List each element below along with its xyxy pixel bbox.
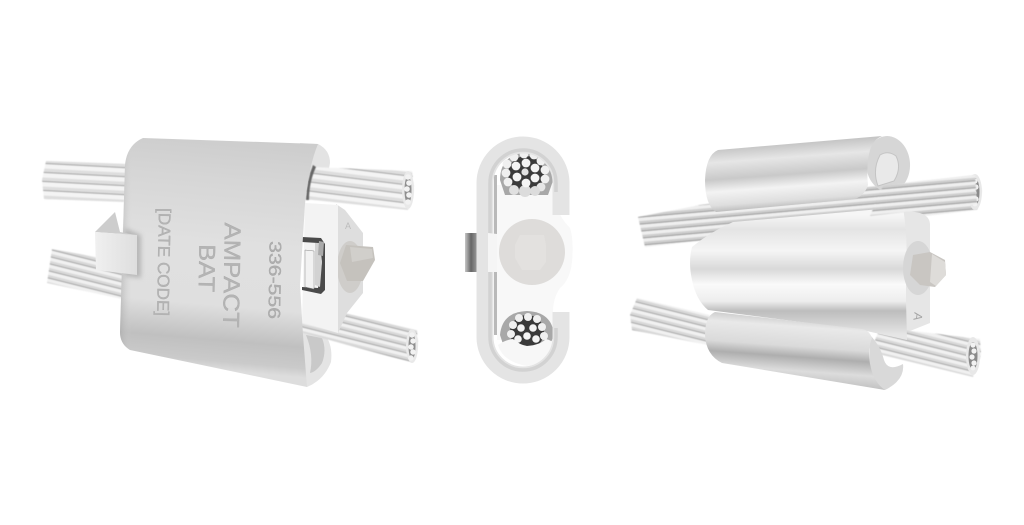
cable passing in front of cylinder end [870, 175, 977, 216]
tab front [95, 232, 137, 275]
clamp front face [120, 138, 318, 387]
cable: lower right [300, 312, 418, 362]
embossed text: date code: [DATE CODE] [153, 208, 174, 316]
mechanism slot [302, 237, 325, 294]
dark gap behind upper right cable [306, 165, 316, 200]
cable: upper [638, 175, 982, 247]
cable: lower left [47, 249, 125, 299]
hex bolt head [340, 245, 375, 281]
bottom conductor [507, 313, 548, 349]
outer clamp hook [485, 145, 561, 375]
embossed plate mark: A [910, 312, 925, 321]
white clamp plate [302, 203, 338, 333]
hex bolt washer [337, 241, 363, 293]
bolt highlight [930, 254, 946, 286]
tab shadow [125, 228, 141, 278]
cable end strands: lower [966, 337, 980, 375]
bolt washer [499, 219, 565, 285]
left connector view [42, 138, 418, 387]
upper cylinder end [864, 134, 912, 194]
right connector view [630, 134, 982, 390]
center connector end view [465, 145, 573, 375]
top conductor [502, 150, 549, 197]
small notch on left [488, 233, 497, 272]
cable end strands: upper right [402, 171, 414, 209]
small slot bracket [318, 241, 324, 256]
top conductor recess [500, 152, 554, 195]
recess in lower rim [306, 335, 324, 373]
embossed text: AMPACT: AMPACT [218, 222, 246, 328]
locking tab [95, 212, 141, 278]
bolt head [515, 235, 546, 270]
upper cylinder body [705, 136, 882, 212]
rear rim of clamp, bottom [296, 330, 331, 387]
rear grey plate [336, 204, 363, 333]
central wedge body [690, 207, 907, 340]
embossed plate mark: A [345, 221, 351, 231]
slot interior [315, 243, 322, 287]
bolt head [910, 252, 946, 287]
cable end strands: upper [968, 174, 982, 210]
lower cylinder end [868, 335, 903, 390]
bolt washer [903, 241, 933, 295]
bottom conductor recess [500, 311, 554, 350]
hook inner rim [490, 150, 556, 370]
face left edge shading [120, 138, 143, 352]
rear grey plate [895, 208, 930, 335]
white center plate [497, 185, 573, 340]
left inner shadow line [494, 175, 497, 335]
white tab in slot [305, 250, 314, 289]
cable: upper left [42, 161, 130, 202]
embossed text: BAT: BAT [194, 244, 220, 292]
bottom wedge insert [498, 339, 556, 366]
lower cylinder body [705, 312, 885, 390]
side tab [465, 233, 477, 272]
lower cable [630, 298, 710, 345]
rear rim of clamp, top [300, 143, 330, 190]
lower right cable [870, 328, 981, 377]
bolt highlight [350, 247, 373, 262]
cable end strands: lower right [406, 329, 418, 363]
embossed text: size range: 336-556 [264, 241, 285, 319]
upper cylinder hollow [875, 153, 899, 186]
cable: upper right [304, 167, 414, 210]
tab top bevel [95, 212, 136, 235]
